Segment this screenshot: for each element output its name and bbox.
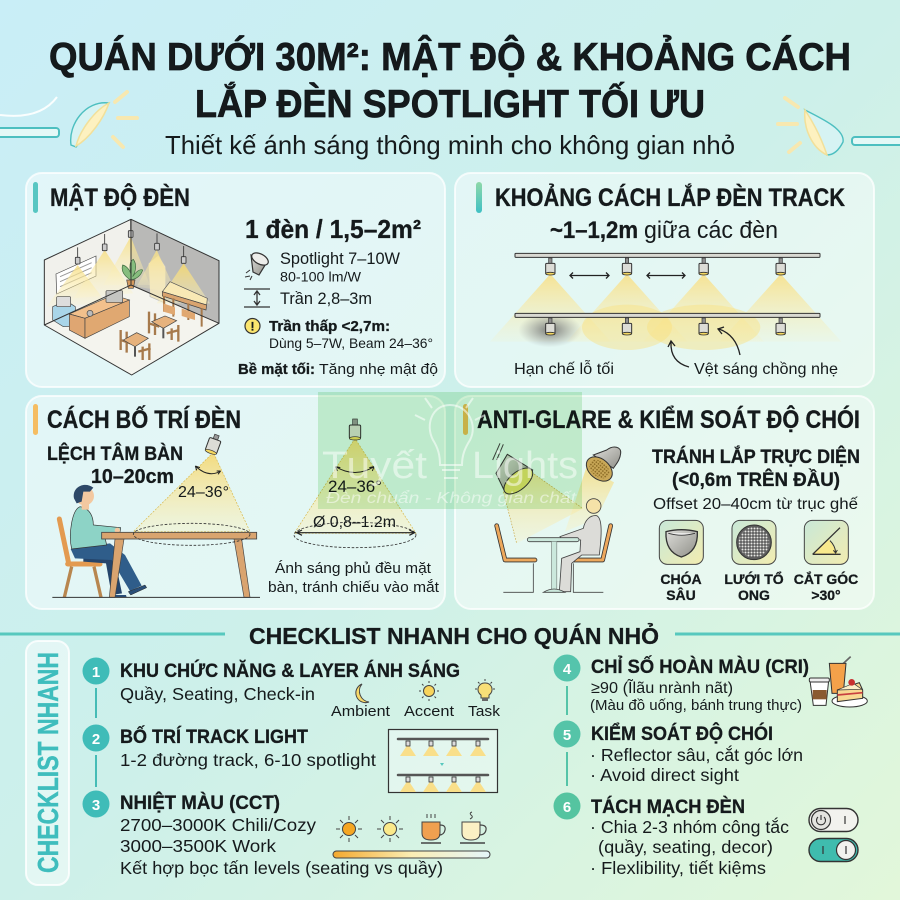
step 4: 4	[563, 661, 572, 678]
spacing value: giữa các đèn	[644, 217, 778, 244]
offset label: 10–20cm	[91, 466, 174, 488]
step 6	[554, 792, 789, 878]
watermark	[318, 392, 582, 509]
step 6: · Chia 2-3 nhóm công tắc	[590, 816, 789, 837]
headline: avoid direct placement	[652, 446, 860, 491]
step 2: 2	[92, 731, 100, 748]
step 5: 5	[563, 727, 571, 744]
icon: warning: !	[250, 320, 254, 334]
title: QUÁN DƯỚI 30M²: MẬT ĐỘ & KHOẢNG CÁCH	[49, 34, 851, 79]
angle label: 24–36°	[178, 484, 229, 501]
illustration: isometric cafe	[44, 219, 219, 375]
step 6: 6	[563, 799, 571, 816]
title: LẮP ĐÈN SPOTLIGHT TỐI ƯU	[195, 81, 705, 126]
header decoration: left lamp	[0, 92, 137, 147]
heading accent bar	[476, 182, 482, 213]
step 4	[554, 654, 809, 714]
step 6: · Flexlibility, tiết kiệms	[590, 858, 766, 878]
spec: spotlight: 80-100 lm/W	[280, 270, 361, 284]
icon: deep reflector	[659, 520, 703, 564]
title	[49, 34, 851, 126]
note: low ceiling: Trần thấp <2,7m:	[269, 319, 390, 335]
step 4: (Màu đồ uống, bánh trung thực)	[590, 698, 802, 714]
caption: Ánh sáng phủ đều mặt	[275, 560, 432, 577]
step connectors right	[566, 686, 568, 786]
step 2	[82, 724, 376, 770]
icon: accent sun	[404, 681, 455, 720]
illustration: person at table	[52, 433, 260, 597]
label: cut-off: >30°	[811, 587, 841, 603]
illustration: light cone	[294, 419, 416, 548]
label: cut-off	[794, 570, 858, 603]
offset note: Offset 20–40cm từ trục ghế	[653, 496, 858, 513]
sidebar: checklist label: CHECKLIST NHANH	[33, 652, 65, 873]
step 3: Kết hợp bọc tấn levels (seating vs quầy)	[120, 858, 443, 878]
spec: spotlight: Spotlight 7–10W	[280, 250, 400, 268]
step 3: 2700–3000K Chili/Cozy	[120, 815, 316, 835]
offset label	[47, 443, 183, 488]
spacing value: ~1–1,2m	[550, 217, 638, 244]
spec: spotlight	[280, 250, 400, 284]
note: dark surface	[238, 361, 438, 378]
mini track diagram	[388, 730, 498, 792]
headline: avoid direct placement: TRÁNH LẮP TRỰC DIỆN	[652, 446, 860, 468]
step 1: KHU CHỨC NĂNG & LAYER ÁNH SÁNG	[120, 658, 460, 682]
watermark: Lights	[472, 445, 578, 487]
step 6: TÁCH MẠCH ĐÈN	[591, 795, 745, 818]
label: overlap: Vệt sáng chồng nhẹ	[694, 361, 838, 378]
arrows: overlap callouts	[668, 327, 740, 367]
step 1	[82, 658, 460, 704]
heading: MẬT ĐỘ ĐÈN	[50, 182, 190, 212]
label: deep reflector: CHÓA	[660, 570, 702, 587]
icon: switch off	[809, 808, 858, 832]
step 1: 1	[92, 664, 100, 681]
spec: ceiling height: Trần 2,8–3m	[280, 290, 372, 308]
note: low ceiling	[269, 319, 433, 351]
label: honeycomb: LƯỚI TỔ	[724, 570, 784, 587]
panel: anti-glare	[455, 396, 874, 609]
label: honeycomb	[724, 570, 784, 603]
arrows: spacing	[570, 272, 685, 278]
headline: avoid direct placement: (<0,6m TRÊN ĐẦU)	[672, 469, 840, 491]
note: dark surface: Bề mặt tối:	[238, 361, 315, 378]
step connectors left	[95, 688, 97, 787]
icon: cut-off angle	[804, 520, 848, 564]
icon: ambient moon	[331, 684, 391, 720]
sidebar: checklist label	[26, 641, 69, 885]
icon: honeycomb grid	[732, 520, 776, 564]
icon: warning	[245, 318, 260, 334]
label: deep reflector: SÂU	[666, 586, 696, 603]
icon: drinks and cake	[809, 657, 867, 707]
watermark: Tuyết	[322, 445, 427, 487]
step 1: Quầy, Seating, Check-in	[120, 684, 315, 704]
icon: task bulb: Task	[468, 703, 501, 720]
heading: KHOẢNG CÁCH LẮP ĐÈN TRACK	[495, 182, 845, 212]
label: dark spots: Hạn chế lỗ tối	[514, 359, 614, 378]
icon: task bulb	[468, 679, 501, 720]
checklist heading: CHECKLIST NHANH CHO QUÁN NHỎ	[249, 621, 659, 649]
header decoration: right lamp	[778, 98, 900, 155]
color temperature icons	[333, 812, 490, 858]
subtitle: Thiết kế ánh sáng thông minh cho không gian nhỏ	[165, 130, 735, 160]
spacing value	[550, 217, 778, 244]
step 3: 3000–3500K Work	[120, 836, 276, 856]
icon: switch on	[809, 838, 858, 862]
heading accent bar	[463, 404, 468, 435]
panel: cách bố trí đèn	[26, 396, 445, 609]
icon: ambient moon: Ambient	[331, 703, 391, 720]
panel: khoảng cách track	[455, 173, 874, 387]
step 5: KIỂM SOÁT ĐỘ CHÓI	[591, 721, 773, 745]
note: low ceiling: Dùng 5–7W, Beam 24–36°	[269, 335, 433, 351]
diameter label: Ø 0,8–1.2m	[313, 514, 396, 531]
label: honeycomb: ONG	[738, 587, 770, 603]
illustration: avoid direct glare	[493, 443, 621, 592]
angle label: 24–36°	[328, 478, 382, 496]
label: deep reflector	[660, 570, 702, 603]
watermark: Đèn chuẩn - Không gian chất	[326, 490, 577, 507]
heading accent bar	[33, 404, 38, 435]
track light diagram	[490, 253, 841, 350]
step 6: (quầy, seating, decor)	[598, 837, 773, 857]
step 4: ≥90 (Ĩlãu nrành nãt)	[591, 677, 733, 697]
step 3: NHIỆT MÀU (CCT)	[120, 790, 280, 814]
heading accent bar	[33, 182, 38, 213]
panel: mật độ đèn	[26, 173, 445, 387]
step 2: 1-2 đường track, 6-10 spotlight	[120, 750, 376, 770]
step 5	[554, 720, 803, 785]
icon: accent sun: Accent	[404, 703, 455, 720]
icon: spotlight	[245, 250, 270, 280]
key metric: 1 đèn / 1,5–2m²	[245, 214, 421, 244]
note: dark surface: Tăng nhẹ mật độ	[319, 361, 438, 378]
step 5: · Reflector sâu, cắt góc lớn	[590, 744, 803, 765]
heading: CÁCH BỐ TRÍ ĐÈN	[47, 404, 241, 434]
caption	[268, 560, 440, 596]
icon: ceiling height	[244, 289, 270, 307]
step 4: CHỈ SỐ HOÀN MÀU (CRI)	[591, 654, 809, 678]
step 5: · Avoid direct sight	[590, 765, 739, 785]
step 3: 3	[92, 797, 100, 814]
step 3	[82, 790, 443, 878]
offset label: LỆCH TÂM BÀN	[47, 443, 183, 465]
label: cut-off: CẮT GÓC	[794, 570, 858, 587]
step 2: BỐ TRÍ TRACK LIGHT	[120, 724, 308, 748]
caption: bàn, tránh chiếu vào mắt	[268, 579, 440, 596]
